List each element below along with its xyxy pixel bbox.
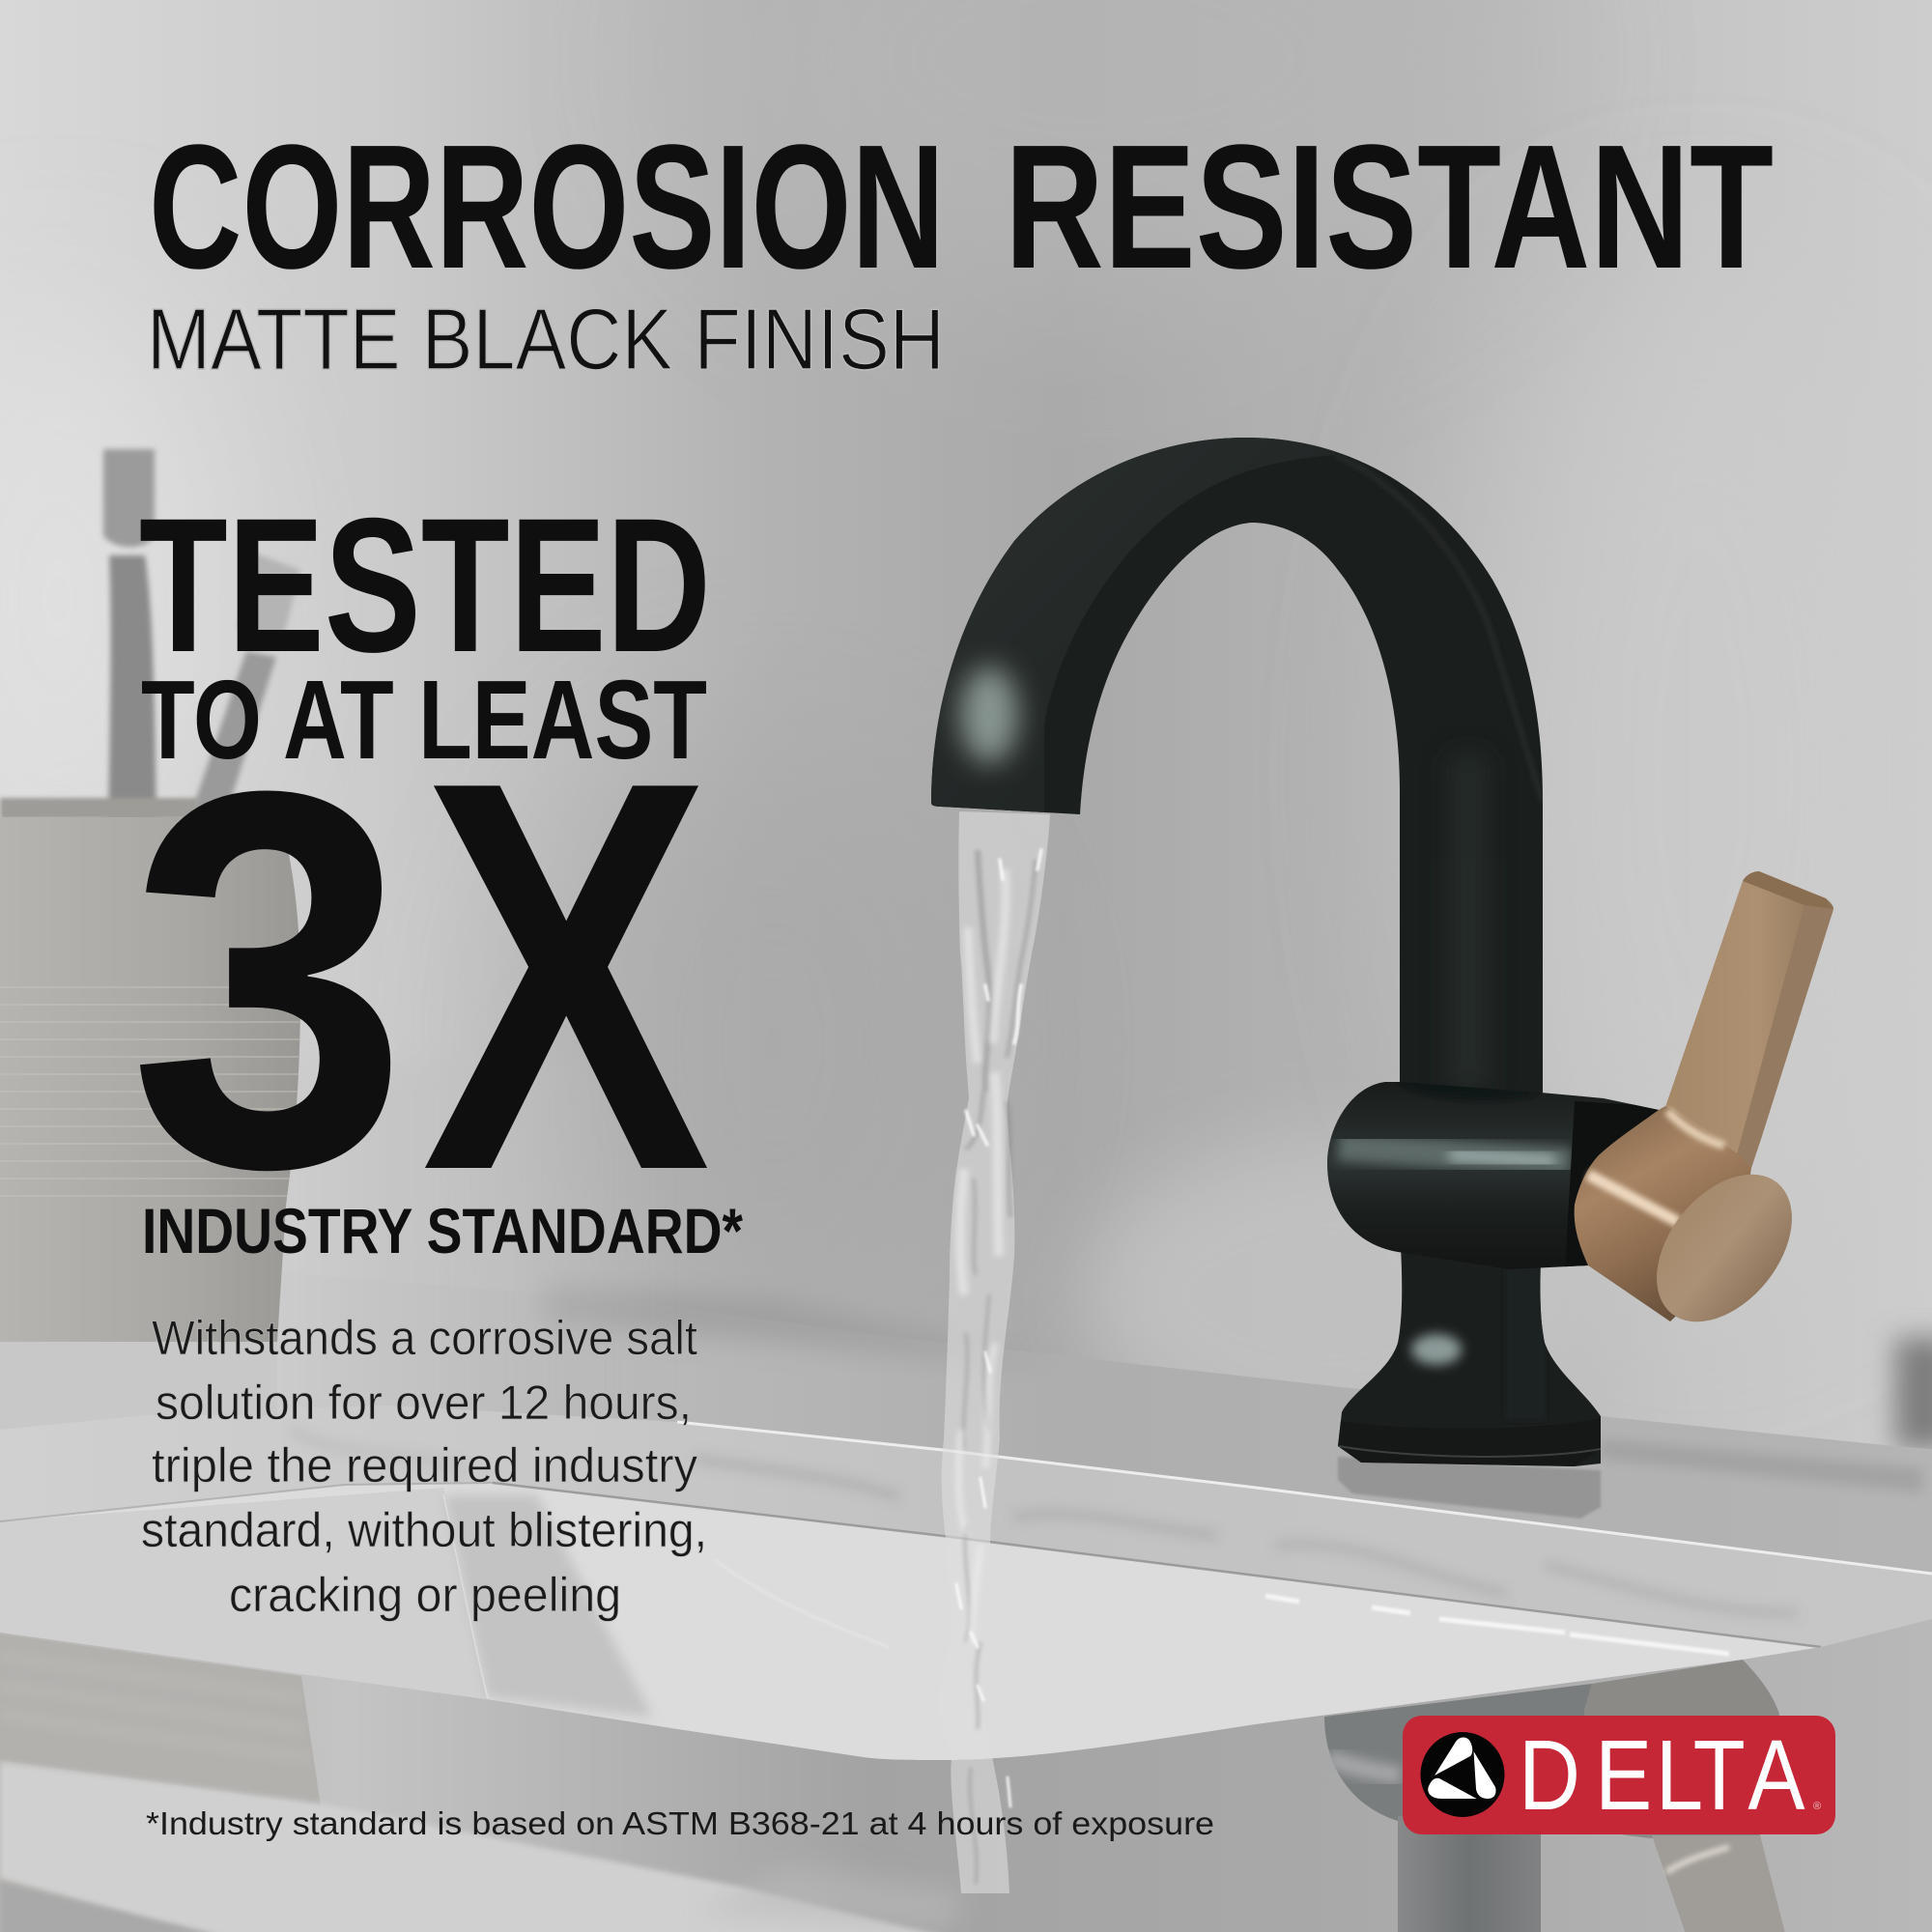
- faucet: bronze lever handle: [1575, 871, 1833, 1348]
- water: falling body: [937, 811, 1050, 1893]
- faucet: [923, 425, 1833, 1468]
- background: lower counter: [0, 1619, 1932, 1932]
- subheading: Matte Black Finish: MATTE BLACK FINISH: [147, 292, 945, 388]
- claim line: Tested: TESTED: [139, 478, 711, 692]
- footnote: *Industry standard is based on ASTM B368-21 at 4 hours of exposure: [146, 1805, 1214, 1841]
- logo: red badge: [1403, 1716, 1835, 1834]
- big figure: 3X: 3: [128, 680, 409, 1279]
- cup: [0, 798, 300, 1430]
- big figure: 3X: X: [421, 665, 713, 1286]
- background: countertop front edge with marble veining: [0, 1406, 1932, 1647]
- water stream: [937, 811, 1050, 1893]
- logo: black emblem circle: [1420, 1732, 1505, 1817]
- logo: white triangle emblem: [1428, 1737, 1496, 1799]
- background: countertop surface: [193, 1265, 1932, 1574]
- body text: triple the required industry: [152, 1438, 697, 1492]
- background: sink basin: [0, 1483, 1821, 1760]
- logo: wordmark: DELTA: [1519, 1720, 1804, 1832]
- logo: registered mark: ®: [1813, 1801, 1821, 1812]
- faucet: horizontal collar: [1323, 1072, 1662, 1275]
- body text: standard, without blistering,: [141, 1503, 707, 1557]
- heading: Corrosion Resistant: CORROSION: [149, 107, 945, 305]
- toothbrushes: [103, 449, 300, 821]
- heading: Corrosion Resistant: [149, 107, 1774, 305]
- body text: [141, 1311, 707, 1622]
- water: bright speculars: [956, 850, 1041, 1806]
- body text: cracking or peeling: [229, 1568, 621, 1622]
- faucet base reflection on countertop: [1338, 1457, 1601, 1519]
- body text: solution for over 12 hours,: [156, 1376, 692, 1430]
- big figure: 3X: [128, 665, 713, 1286]
- body text: Withstands a corrosive salt: [152, 1311, 697, 1365]
- claim line: Industry standard: INDUSTRY STANDARD*: [142, 1195, 743, 1266]
- faucet: arched spout: [923, 425, 1546, 1111]
- water: soft light ribbons: [958, 869, 1006, 1642]
- Delta logo: [1403, 1716, 1835, 1834]
- claim: Tested to at least 3X industry standard: [128, 478, 743, 1286]
- water: darker folds: [963, 850, 1036, 1884]
- reflection of faucet in lower counter: [1324, 1660, 1786, 1932]
- claim line: To at least: TO AT LEAST: [141, 657, 707, 782]
- faucet: base pedestal: [1338, 1252, 1601, 1466]
- background: light area beside the cup: [193, 1063, 676, 1425]
